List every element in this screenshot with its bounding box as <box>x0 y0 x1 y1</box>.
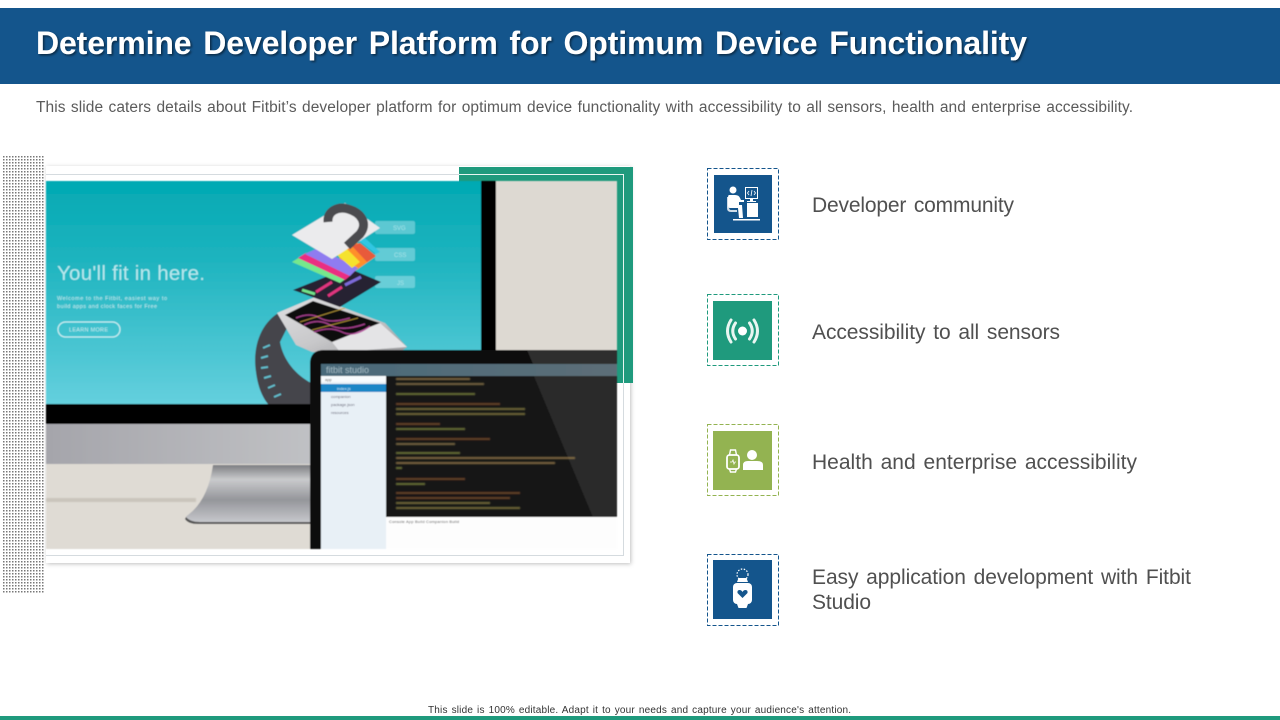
title banner: Determine Developer Platform for Optimum Device Functionality <box>36 25 1027 61</box>
subtitle text: This slide caters details about Fitbit’s developer platform for optimum device functionality with accessibility to all sensors, health and enterprise accessibility. <box>36 99 1133 116</box>
label: Studio <box>812 591 871 614</box>
layer 3 dark <box>293 268 381 307</box>
label <box>812 566 1191 614</box>
dotted decoration panel <box>2 155 45 593</box>
exploded watch illustration <box>255 203 415 404</box>
item 1: developer community <box>708 168 1014 240</box>
laptop with code editor: package.json <box>331 402 355 407</box>
laptop with code editor: index.js <box>337 386 351 391</box>
layer 1 white with number <box>292 203 380 259</box>
exploded watch illustration: CSS <box>394 253 406 259</box>
exploded watch illustration: JS <box>397 281 404 287</box>
label: Developer community <box>812 194 1014 217</box>
icon: developer at desk <box>708 168 778 240</box>
laptop with code editor <box>310 350 617 549</box>
laptop with code editor: fitbit studio <box>326 365 369 375</box>
item 3: health and enterprise accessibility <box>708 424 1138 496</box>
watch strap <box>255 312 311 404</box>
headline on monitor: build apps and clock faces for Free <box>57 304 157 310</box>
icon: watch and person <box>708 424 778 496</box>
label: Easy application development with Fitbit <box>812 566 1191 589</box>
code lines <box>396 379 575 508</box>
icon: broadcast signal <box>708 294 778 366</box>
label: Health and enterprise accessibility <box>812 451 1138 474</box>
laptop with code editor: Console App Build Companion Build <box>389 519 459 524</box>
label: Accessibility to all sensors <box>812 321 1060 344</box>
item 2: accessibility to all sensors <box>708 294 1060 366</box>
exploded watch illustration: SVG <box>393 226 406 232</box>
item 4: easy application development <box>708 554 1191 626</box>
footer note: This slide is 100% editable. Adapt it to your needs and capture your audience's attention. <box>428 705 851 716</box>
headline on monitor: Welcome to the Fitbit, easiest way to <box>57 296 167 302</box>
layer 2 rainbow <box>338 242 375 278</box>
footer bar <box>0 716 1280 720</box>
title banner <box>0 8 1280 84</box>
laptop with code editor: app <box>325 377 332 382</box>
icon: smartwatch with heart <box>708 554 778 626</box>
headline on monitor: You'll fit in here. <box>57 262 205 285</box>
desktop monitor scene <box>46 181 617 549</box>
picture frame <box>46 166 633 563</box>
laptop with code editor: companion <box>331 394 351 399</box>
product screenshot image <box>46 181 617 549</box>
watch case <box>277 297 407 352</box>
headline on monitor: LEARN MORE <box>69 328 108 334</box>
headline on monitor <box>57 262 205 337</box>
laptop with code editor: resources <box>331 410 349 415</box>
